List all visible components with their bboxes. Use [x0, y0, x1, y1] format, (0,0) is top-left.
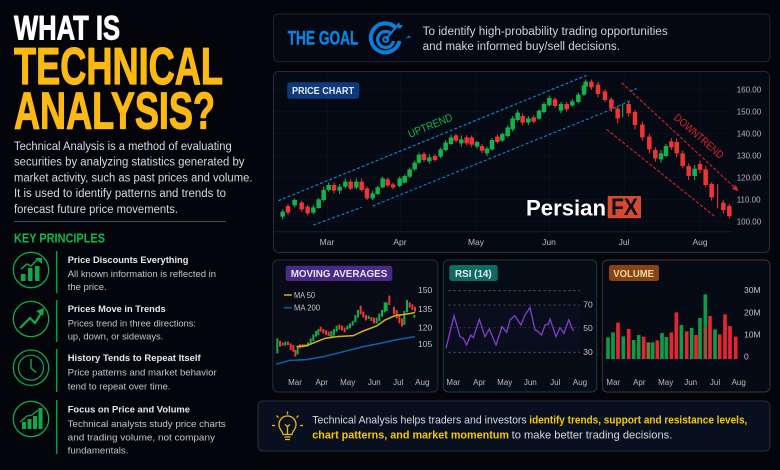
logo: PersianFX: Persian: [526, 196, 606, 221]
price axis: 135: [418, 304, 432, 314]
price axis: 140.00: [737, 129, 762, 138]
principle: prices move in trends: Prices trend in three directions:: [68, 318, 196, 329]
badge: moving averages: [286, 266, 392, 281]
goal text: [423, 26, 668, 53]
month axis: Apr: [473, 378, 486, 387]
month axis: Aug: [692, 237, 708, 247]
principle: focus on price and volume: Focus on Price and Volume: [68, 404, 190, 415]
principle: prices move in trends: Prices Move in Trends: [68, 304, 166, 315]
month axis: Aug: [415, 378, 429, 387]
icon: rising bars: [13, 252, 49, 288]
volume axis: 10M: [744, 329, 761, 339]
principle: history tends to repeat itself: tend to repeat over time.: [68, 381, 170, 392]
icon: target: [371, 22, 412, 52]
title: WHAT IS: [14, 9, 120, 47]
RSI axis: 70: [583, 300, 593, 310]
candlesticks and trend channels: [278, 75, 739, 225]
month axis: Jun: [368, 378, 381, 387]
RSI axis: [583, 300, 593, 357]
volume axis: 0: [744, 352, 749, 362]
intro text block: forecast future price movements.: [14, 204, 178, 216]
callout text: identify trends, support and resistance levels,: [529, 414, 747, 426]
principle: focus on price and volume: [13, 400, 226, 457]
title: TECHNICAL: [14, 38, 223, 96]
badge: RSI: RSI (14): [455, 269, 492, 280]
month axis: Mar: [606, 378, 621, 387]
RSI axis: 30: [583, 347, 593, 357]
principle: prices move in trends: up, down, or sideways.: [68, 331, 163, 342]
intro text block: market activity, such as past prices and volume.: [14, 172, 252, 184]
month axis: May: [340, 378, 355, 387]
panel: RSI: [443, 260, 597, 392]
principle: price discounts everything: Price Discounts Everything: [68, 255, 189, 266]
month axis: Mar: [288, 378, 302, 387]
heading: the goal: THE GOAL: [288, 29, 359, 50]
month axis: May: [468, 237, 485, 247]
month axis: Mar: [320, 237, 334, 247]
price axis: 110.00: [737, 195, 761, 204]
month axis: Jun: [524, 378, 537, 387]
callout text: [312, 414, 747, 441]
principle: history tends to repeat itself: Price patterns and market behavior: [68, 368, 217, 379]
price axis: [737, 85, 762, 226]
label: uptrend: UPTREND: [407, 112, 455, 141]
badge: volume: [609, 265, 659, 281]
price axis: 100.00: [737, 218, 762, 226]
volume bar chart: [608, 294, 736, 359]
goal text: and make informed buy/sell decisions.: [423, 41, 620, 53]
principle: prices move in trends: [13, 300, 196, 342]
month axis: [606, 378, 746, 387]
price axis: 120: [418, 322, 432, 332]
principle: history tends to repeat itself: [13, 349, 217, 392]
title: [14, 9, 223, 140]
month axis: May: [497, 378, 512, 387]
month axis: Jul: [393, 378, 404, 387]
heading: key principles: KEY PRINCIPLES: [14, 232, 105, 246]
principle: price discounts everything: [13, 251, 216, 293]
intro text block: Technical Analysis is a method of evaluating: [14, 141, 232, 153]
badge: RSI: [449, 265, 498, 281]
price axis: [418, 285, 432, 349]
month axis: Jun: [684, 378, 697, 387]
callout text: Technical Analysis helps traders and investors: [312, 414, 527, 426]
badge: moving averages: MOVING AVERAGES: [291, 269, 388, 280]
title: ANALYSIS?: [14, 82, 215, 140]
month axis: [446, 378, 587, 387]
price axis: 130.00: [737, 151, 762, 160]
callout text: to make better trading decisions.: [512, 429, 672, 441]
month axis: Apr: [393, 237, 407, 247]
price axis: 150: [418, 285, 432, 295]
principle: price discounts everything: the price.: [68, 282, 107, 293]
legend: MA 50: [294, 291, 316, 300]
intro text block: [14, 141, 252, 216]
month axis: Jul: [710, 378, 720, 387]
RSI axis: 50: [583, 323, 593, 333]
badge: price chart: PRICE CHART: [292, 86, 354, 97]
month axis: [320, 237, 708, 247]
label: downtrend: DOWNTREND: [671, 112, 726, 162]
month axis: Aug: [732, 378, 746, 387]
legend: MA 200: [294, 304, 321, 312]
price axis: 160.00: [737, 85, 762, 94]
principle: focus on price and volume: fundamentals.: [68, 446, 128, 457]
goal text: To identify high-probability trading opportunities: [423, 26, 668, 38]
intro text block: It is used to identify patterns and trends to: [14, 188, 226, 200]
month axis: May: [658, 378, 673, 387]
panel: volume: [602, 260, 770, 392]
month axis: Mar: [446, 378, 461, 387]
panel: moving averages: [273, 260, 438, 392]
price axis: 150.00: [737, 107, 762, 116]
price axis: 120.00: [737, 173, 762, 182]
principle: price discounts everything: All known information is reflected in: [68, 269, 216, 280]
volume axis: [744, 285, 761, 362]
logo: PersianFX: [526, 194, 641, 221]
principle: history tends to repeat itself: History Tends to Repeat Itself: [68, 353, 202, 364]
month axis: Jul: [619, 237, 630, 247]
month axis: Apr: [315, 378, 328, 387]
callout text: chart patterns, and market momentum: [312, 429, 509, 441]
logo: PersianFX: FX: [611, 194, 638, 221]
RSI line chart: [446, 291, 580, 352]
badge: price chart: [287, 82, 359, 99]
intro text block: securities by analyzing statistics generated by: [14, 157, 245, 169]
icon: trend arrow: [13, 301, 49, 337]
month axis: Jun: [542, 237, 556, 247]
legend: [284, 291, 321, 312]
principle: focus on price and volume: and trading volume, not company: [68, 433, 215, 444]
icon: volume bars: [13, 401, 49, 437]
month axis: Aug: [573, 378, 587, 387]
volume axis: 30M: [744, 285, 761, 295]
panel: the goal: [274, 14, 770, 62]
principle: focus on price and volume: Technical analysts study price charts: [68, 419, 226, 430]
badge: volume: VOLUME: [613, 269, 654, 280]
panel: price chart: [274, 72, 770, 252]
month axis: [288, 378, 429, 387]
volume axis: 20M: [744, 307, 761, 317]
month axis: Jul: [550, 378, 561, 387]
callout: summary: [258, 401, 770, 451]
icon: clock: [13, 350, 49, 385]
month axis: Apr: [633, 378, 646, 387]
line chart with candles: [276, 296, 415, 364]
price axis: 105: [418, 339, 432, 349]
icon: light bulb: [272, 412, 303, 440]
